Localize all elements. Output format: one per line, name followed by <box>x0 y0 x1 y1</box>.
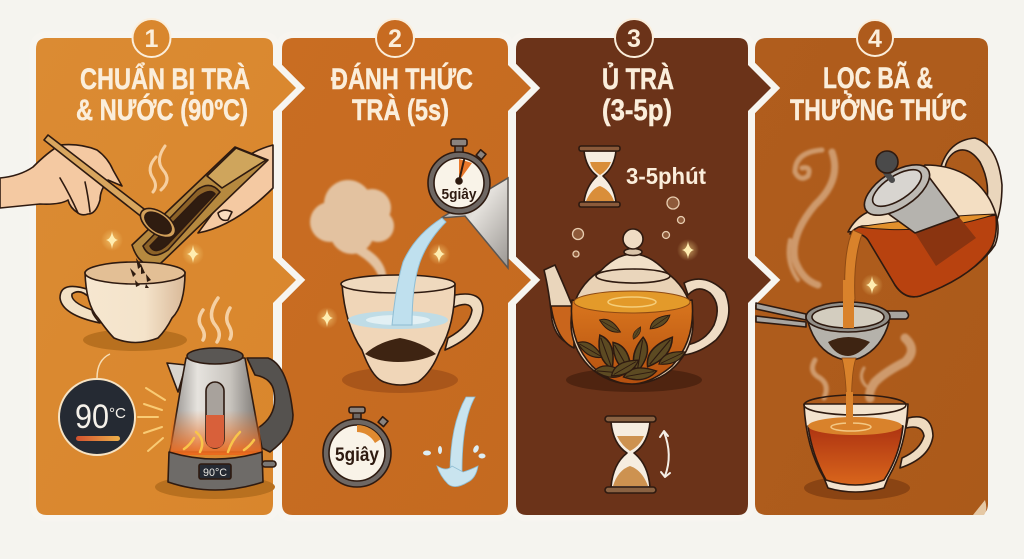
illustration: falling tea leaves <box>130 258 151 288</box>
badge 4 <box>857 20 893 56</box>
icon: heat rays <box>138 388 165 451</box>
icon: hourglass bottom <box>605 416 656 493</box>
panel: step 2 background <box>282 38 531 515</box>
illustration: tea stream through strainer <box>842 280 856 425</box>
title: step 4: LỌC BÃ & <box>823 61 933 95</box>
illustration: wooden spoon <box>44 135 181 243</box>
icon: flames inside kettle <box>184 432 254 452</box>
badge 2 <box>376 19 414 57</box>
title: step 1: CHUẨN BỊ TRÀ <box>80 62 250 96</box>
title: step 3: (3-5p) <box>602 94 672 127</box>
title: step 3 <box>602 62 674 127</box>
illustration: bamboo tea scoop <box>132 147 268 265</box>
title: step 3: Ủ TRÀ <box>602 62 674 96</box>
badge 2: 2 <box>388 25 402 53</box>
icon: hourglass top <box>579 146 620 207</box>
title: step 2: TRÀ (5s) <box>352 93 449 127</box>
title: step 2 <box>331 62 473 127</box>
badge 4: 4 <box>868 25 882 53</box>
illustration: kettle spout pouring <box>441 178 508 268</box>
illustration: hand holding spoon <box>0 145 122 215</box>
illustration: glass tea cup <box>804 395 933 500</box>
badge 3: 3 <box>627 25 641 53</box>
panel corner peel <box>973 500 986 515</box>
illustration: stream into cup <box>846 392 853 428</box>
icon: sparkle <box>861 274 883 296</box>
title: step 2: ĐÁNH THỨC <box>331 62 473 96</box>
illustration: strainer <box>756 302 908 360</box>
illustration: glass teapot <box>544 229 729 392</box>
icon: sparkle <box>428 243 450 265</box>
title: step 1 <box>76 62 250 127</box>
icon: temperature dial: °C <box>109 405 126 422</box>
icon: bubbles <box>572 197 684 257</box>
illustration: water stream <box>392 218 446 325</box>
icon: temperature dial <box>59 354 135 455</box>
icon: flip arrow <box>660 431 670 477</box>
panel: step 1 background <box>36 38 296 515</box>
badge 1 <box>132 19 170 57</box>
text: stopwatch label: 5giây <box>335 445 379 466</box>
icon: temperature dial: 90 <box>75 398 109 436</box>
text: stopwatch label 5 giay: 5giây <box>442 186 477 203</box>
icon: sparkle <box>316 307 338 329</box>
panel: step 3 background <box>516 38 771 515</box>
illustration: glass cup with water <box>341 275 483 393</box>
badge 3 <box>615 19 653 57</box>
icon: sparkle <box>182 243 204 265</box>
badge 1: 1 <box>145 25 159 53</box>
illustration: steam cloud <box>310 180 394 285</box>
title: step 4: THƯỞNG THỨC <box>790 93 967 127</box>
title: step 4 <box>790 61 967 127</box>
illustration: tea stream <box>845 230 862 300</box>
text: 3-5 minutes: 3-5phút <box>626 163 706 189</box>
illustration: electric kettle <box>155 348 293 499</box>
illustration: curling steam left <box>789 150 835 285</box>
icon: sparkle <box>101 229 123 251</box>
icon: stopwatch bottom <box>323 407 391 487</box>
text: kettle display: 90°C <box>203 467 227 479</box>
icon: sparkle <box>677 239 699 261</box>
illustration: cream tea cup <box>60 262 187 351</box>
illustration: pouring glass teapot <box>848 138 1002 297</box>
icon: stopwatch top <box>428 139 490 214</box>
panel: step 4 background <box>755 38 988 515</box>
illustration: steam beside cup <box>812 338 912 398</box>
icon: steam above scoop <box>150 146 167 192</box>
illustration: steeping leaves <box>575 311 687 382</box>
title: step 1: & NƯỚC (90ºC) <box>76 93 248 127</box>
icon: water splash <box>423 397 486 487</box>
illustration: right hand <box>198 145 273 233</box>
icon: steam above kettle <box>199 298 231 342</box>
